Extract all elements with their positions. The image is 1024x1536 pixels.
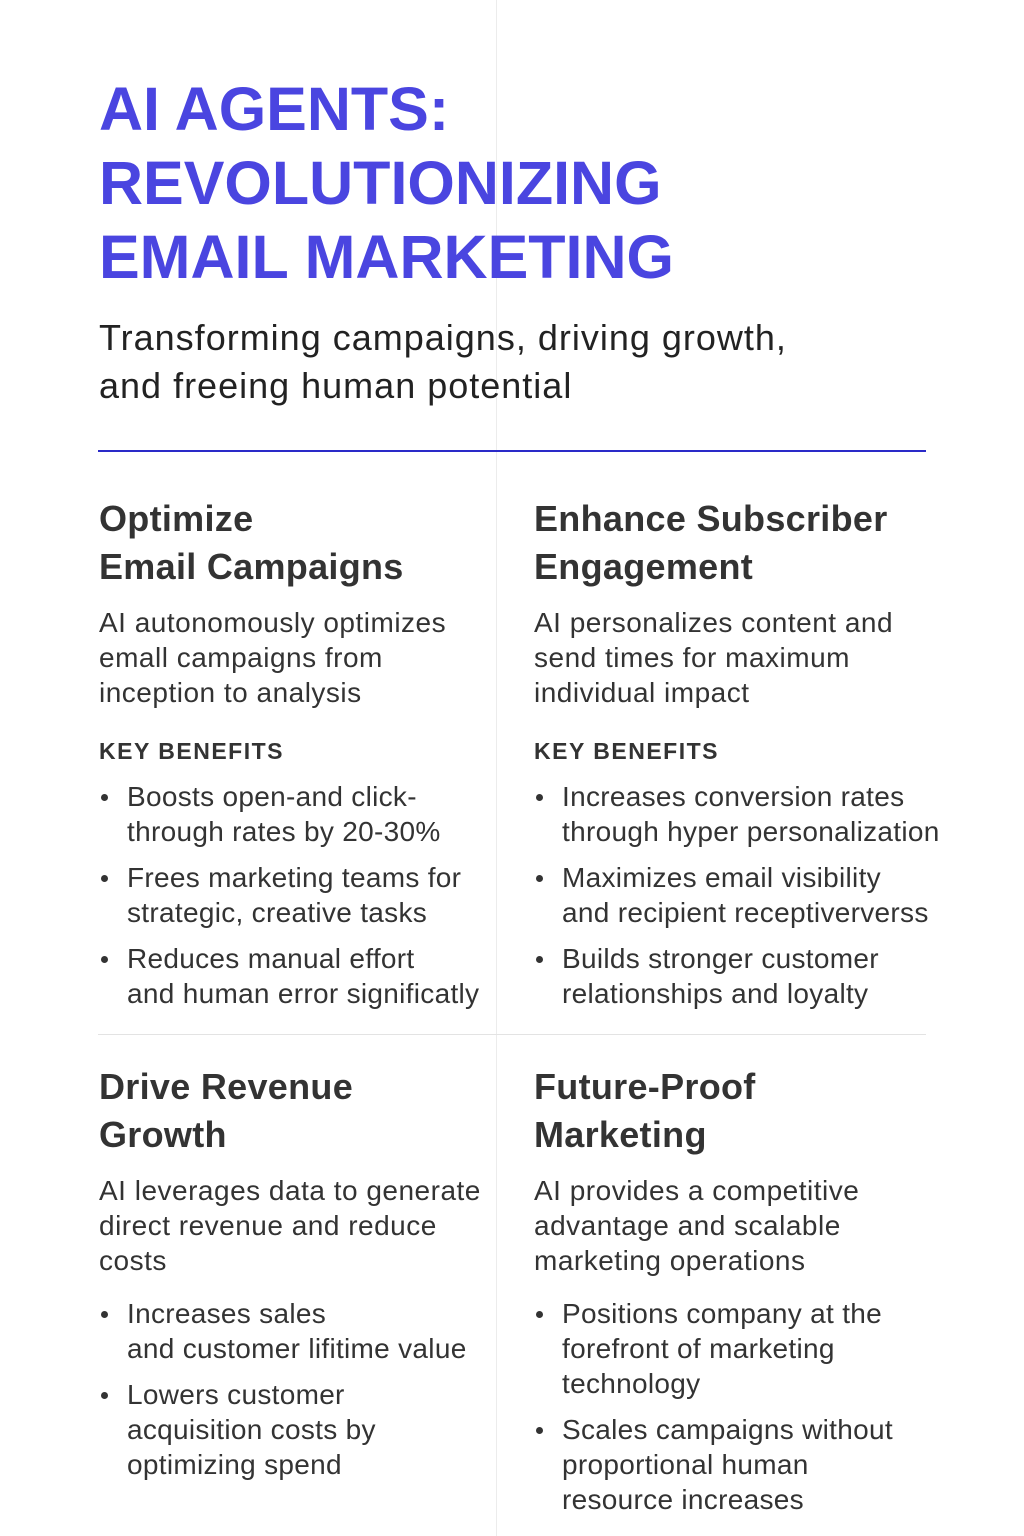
bullets [536,1298,893,1515]
description: AI personalizes content and [534,607,893,638]
heading: Optimize [99,498,253,539]
bullets: through rates by 20-30% [127,816,441,847]
description: costs [99,1245,167,1276]
bullets: Lowers customer [127,1379,345,1410]
title: REVOLUTIONIZING [99,149,662,217]
description: send times for maximum [534,642,850,673]
bullets: strategic, creative tasks [127,897,427,928]
description [534,1175,859,1276]
heading [534,1066,756,1155]
bullets: optimizing spend [127,1449,342,1480]
bullets: and recipient receptiververss [562,897,929,928]
heading [99,498,404,587]
heading: Future-Proof [534,1066,756,1107]
heading: Marketing [534,1114,707,1155]
heading: Enhance Subscriber [534,498,888,539]
bullets: relationships and loyalty [562,978,868,1009]
bullets: and human error significatly [127,978,479,1009]
bullets: Scales campaigns without [562,1414,893,1445]
subtitle: Transforming campaigns, driving growth, [99,317,787,358]
bullets: and customer lifitime value [127,1333,467,1364]
description: AI leverages data to generate [99,1175,481,1206]
key benefits label: KEY BENEFITS [99,738,284,764]
subtitle: and freeing human potential [99,365,572,406]
heading: Growth [99,1114,227,1155]
description: direct revenue and reduce [99,1210,437,1241]
bullets: Boosts open-and click- [127,781,417,812]
description [99,607,446,708]
heading: Email Campaigns [99,546,404,587]
bullets: through hyper personalization [562,816,940,847]
title: EMAIL MARKETING [99,223,674,291]
panel: drive revenue growth [99,1066,481,1480]
bullets [536,781,940,1009]
bullets: Positions company at the [562,1298,882,1329]
heading: Drive Revenue [99,1066,353,1107]
description: emall campaigns from [99,642,383,673]
description [99,1175,481,1276]
bullets: Frees marketing teams for [127,862,461,893]
title [99,75,674,291]
description: individual impact [534,677,750,708]
panel: optimize email campaigns [99,498,479,1009]
panel: future-proof marketing [534,1066,893,1515]
bullets: Builds stronger customer [562,943,879,974]
bullets: Increases sales [127,1298,326,1329]
bullets: Increases conversion rates [562,781,904,812]
description: AI autonomously optimizes [99,607,446,638]
description: inception to analysis [99,677,362,708]
key benefits label: KEY BENEFITS [534,738,719,764]
description: AI provides a competitive [534,1175,859,1206]
bullets: forefront of marketing [562,1333,835,1364]
description: advantage and scalable [534,1210,841,1241]
heading: Engagement [534,546,753,587]
subtitle [99,317,787,406]
title: AI AGENTS: [99,75,449,143]
bullets: technology [562,1368,700,1399]
bullets: Reduces manual effort [127,943,415,974]
bullets: resource increases [562,1484,804,1515]
bullets: proportional human [562,1449,809,1480]
heading [534,498,888,587]
bullets: acquisition costs by [127,1414,376,1445]
description [534,607,893,708]
bullets [101,781,479,1009]
panel: enhance subscriber engagement [534,498,940,1009]
heading [99,1066,353,1155]
bullets [101,1298,467,1480]
description: marketing operations [534,1245,805,1276]
bullets: Maximizes email visibility [562,862,881,893]
